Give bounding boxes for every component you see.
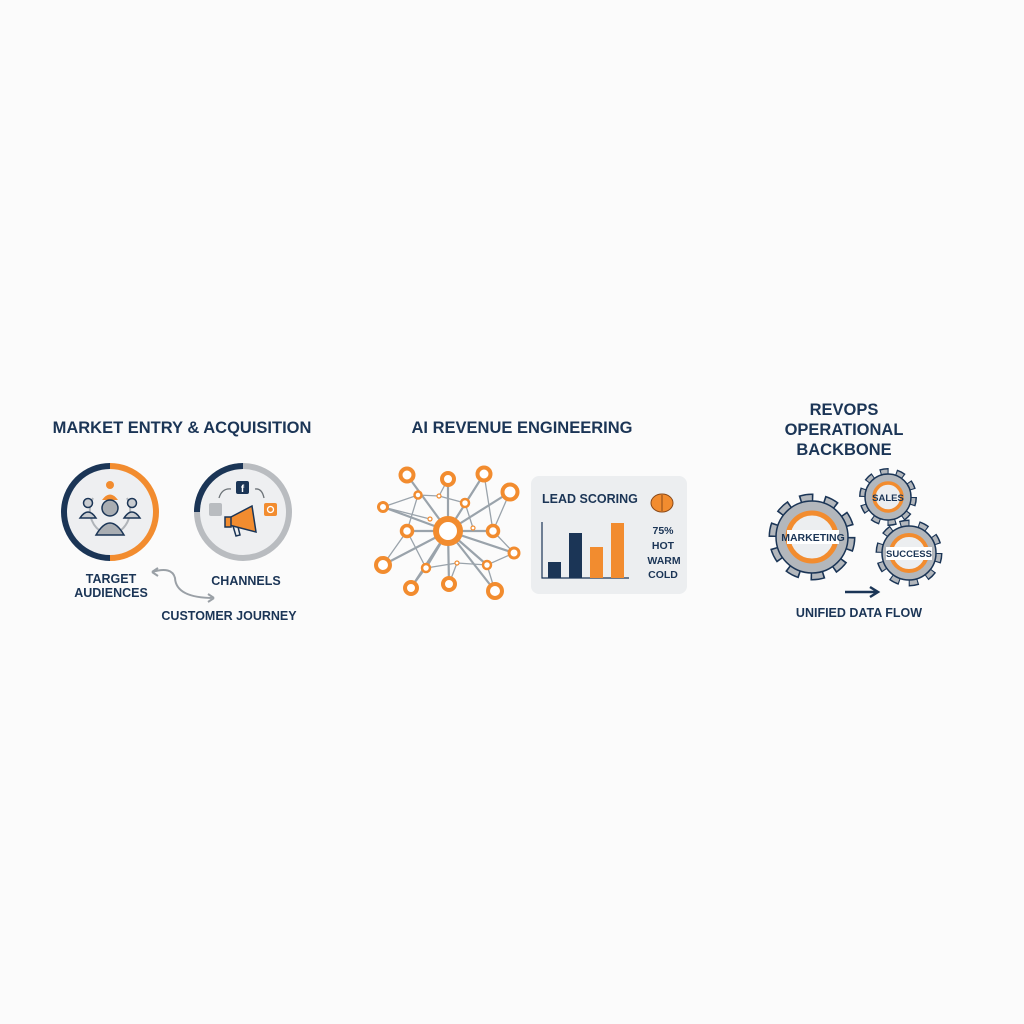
arrow: customer journey <box>152 568 214 602</box>
panel: market entry & acquisition <box>53 419 311 623</box>
legend: scores: COLD <box>648 569 678 581</box>
heading: revops: OPERATIONAL <box>785 421 903 439</box>
legend: scores <box>647 525 681 581</box>
legend: scores: WARM <box>647 555 681 567</box>
label: lead scoring: LEAD SCORING <box>542 492 638 506</box>
icon: target audiences circle <box>64 466 156 558</box>
chart: neural network <box>376 468 519 598</box>
icon: channels circle: f <box>241 484 245 495</box>
bar chart <box>542 522 629 578</box>
heading: revops: BACKBONE <box>796 441 892 459</box>
heading: revops: REVOPS <box>810 401 878 419</box>
label: customer journey: CUSTOMER JOURNEY <box>161 609 297 623</box>
panel: lead scoring card <box>531 476 687 594</box>
legend: scores: 75% <box>652 525 674 537</box>
icon: marketing gear: MARKETING <box>781 532 845 544</box>
legend: scores: HOT <box>652 540 675 552</box>
icon: channels circle <box>197 466 289 558</box>
icon: brain <box>651 494 673 512</box>
panel: AI revenue engineering <box>376 419 687 598</box>
icon: success gear <box>881 525 937 581</box>
icon: success gear: SUCCESS <box>886 549 932 560</box>
label: target audiences: TARGET <box>86 572 137 586</box>
heading: market entry: MARKET ENTRY & ACQUISITION <box>53 419 311 437</box>
icon: sales gear: SALES <box>872 493 904 504</box>
label: target audiences: AUDIENCES <box>74 586 148 600</box>
label: unified data flow: UNIFIED DATA FLOW <box>796 606 922 620</box>
icon: marketing gear <box>775 500 849 574</box>
panel: revops backbone <box>775 401 937 620</box>
icon: sales gear <box>864 473 912 521</box>
heading: AI revenue: AI REVENUE ENGINEERING <box>412 419 632 437</box>
arrow: data flow <box>845 587 878 597</box>
label: channels: CHANNELS <box>211 574 281 588</box>
